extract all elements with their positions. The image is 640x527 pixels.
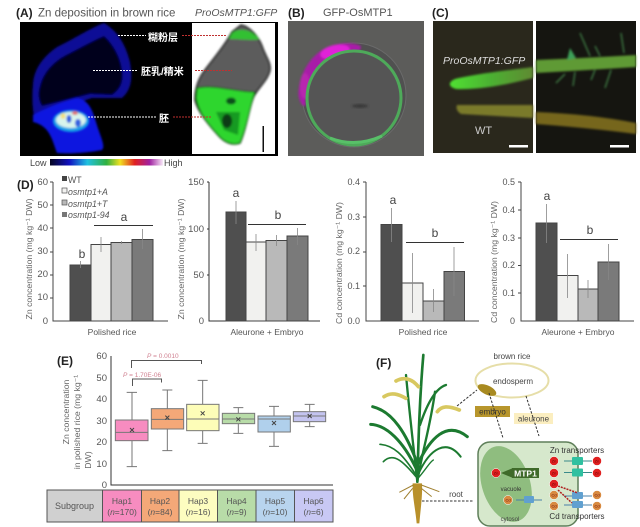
illustration: cell with transporters: Cd xyxy=(594,504,600,508)
label: aleurone: aleurone xyxy=(518,414,550,424)
axis: y ticks: 50 xyxy=(96,373,107,384)
panel: F model diagram xyxy=(371,352,605,527)
illustration: cell with transporters: vacuole xyxy=(501,487,522,493)
illustration: cell with transporters: cytosol xyxy=(501,517,519,523)
box: Hap3 xyxy=(187,380,219,443)
chart: Zn aleurone + embryo: Aleurone + Embryo xyxy=(230,327,304,337)
heading: F: (F) xyxy=(376,356,391,370)
box: Hap5 xyxy=(258,406,290,446)
axis: y ticks xyxy=(96,351,107,491)
image: ProOsMTP1:GFP grain section xyxy=(192,23,275,154)
box: Hap2 xyxy=(151,390,184,451)
chart: Cd polished rice: Polished rice xyxy=(399,327,448,337)
table: subgroup haplotypes: (n=170) xyxy=(107,507,137,517)
chart: Cd aleurone + embryo: 0.3 xyxy=(502,233,515,243)
image: root tips with label xyxy=(433,21,533,153)
chart: Cd polished rice: 0.0 xyxy=(347,316,360,326)
table: subgroup haplotypes: Hap1 xyxy=(112,496,132,506)
chart: Zn polished rice: 40 xyxy=(37,223,48,234)
illustration: cell with transporters xyxy=(471,439,605,527)
image: root tips with label: ProOsMTP1:GFP xyxy=(443,55,525,67)
table: subgroup haplotypes: (n=6) xyxy=(303,507,324,517)
illustration: grain with endosperm: endosperm xyxy=(493,377,533,386)
chart: Cd polished rice: b xyxy=(432,226,439,240)
legend: Low to High colour scale: Low xyxy=(30,158,47,168)
table: subgroup haplotypes: (n=84) xyxy=(148,507,173,517)
legend: genotypes xyxy=(62,175,110,220)
box: Hap1 xyxy=(115,392,148,467)
chart: Zn polished rice: a xyxy=(121,210,128,224)
label: Zn transporters: Zn transporters xyxy=(550,446,604,455)
chart: Cd polished rice: Cd concentration (mg kg⁻¹ DW) xyxy=(334,202,344,324)
label: MTP1: MTP1 xyxy=(514,468,537,478)
axis: y ticks: 10 xyxy=(96,459,107,470)
label: brown rice: brown rice xyxy=(494,352,531,361)
chart: Cd polished rice: 0.1 xyxy=(347,281,360,291)
illustration: cell with transporters: Zn xyxy=(595,458,599,464)
legend: genotypes: osmtp1+A xyxy=(68,187,108,197)
label: embryo callout: 胚 xyxy=(159,113,169,125)
heading: D: (D) xyxy=(17,178,34,192)
illustration: cell with transporters: Zn xyxy=(552,482,556,486)
title: ProOsMTP1:GFP: ProOsMTP1:GFP xyxy=(195,7,277,19)
label: endosperm callout: 胚乳/精米 xyxy=(141,65,184,78)
label: embryo: embryo xyxy=(479,408,506,416)
illustration: cell with transporters: Zn xyxy=(552,470,556,476)
chart: Cd aleurone + embryo: 0.5 xyxy=(502,177,515,187)
axis title: Zn concentration in polished rice: DW) xyxy=(83,451,93,469)
table: subgroup haplotypes: Hap5 xyxy=(265,496,285,506)
chart: Cd aleurone + embryo: b xyxy=(587,223,594,237)
chart: Cd aleurone + embryo: 0.2 xyxy=(502,260,515,270)
title: Zn deposition in brown rice: Zn deposition in brown rice xyxy=(38,8,175,20)
chart: Zn polished rice xyxy=(24,177,168,337)
panel: B GFP-OsMTP1 xyxy=(288,6,424,156)
axis title: Zn concentration in polished rice: in polished rice (mg kg⁻¹ xyxy=(72,375,82,469)
illustration: cell with transporters: Cd xyxy=(551,492,557,498)
label: root: root xyxy=(449,490,464,499)
illustration: rice plant xyxy=(371,355,467,523)
chart: Zn polished rice: 10 xyxy=(37,292,48,303)
image: root tips with label: WT xyxy=(475,125,492,137)
label: embryo xyxy=(475,406,510,417)
table: subgroup haplotypes xyxy=(47,490,333,522)
illustration: cell with transporters: Cd xyxy=(551,504,557,508)
illustration: cell with transporters: Zn xyxy=(494,470,498,476)
table: subgroup haplotypes: Subgroup xyxy=(55,501,94,511)
chart: Zn polished rice: b xyxy=(79,247,86,261)
chart: Zn polished rice: Polished rice xyxy=(88,327,137,337)
box: Hap6 xyxy=(293,404,326,427)
chart: Cd aleurone + embryo: Cd concentration (mg kg⁻¹ DW) xyxy=(489,201,499,323)
illustration: cell with transporters: Cd xyxy=(505,498,511,502)
chart: Zn aleurone + embryo: b xyxy=(275,208,282,222)
chart: Cd polished rice xyxy=(334,177,479,337)
chart: Zn aleurone + embryo: 100 xyxy=(188,224,204,235)
arrows: tissue connections xyxy=(422,390,539,501)
chart: Zn polished rice: 50 xyxy=(37,200,48,211)
illustration: grain with endosperm xyxy=(476,364,548,398)
chart: Cd aleurone + embryo: Aleurone + Embryo xyxy=(542,327,615,337)
illustration: cell with transporters: Zn xyxy=(595,470,599,476)
chart: Zn aleurone + embryo: 0 xyxy=(199,316,204,327)
panel: A Zn deposition xyxy=(16,6,278,168)
image: protoplast micrograph xyxy=(288,21,424,156)
chart: Zn polished rice: 30 xyxy=(37,246,48,257)
axis title: Zn concentration in polished rice xyxy=(61,375,93,469)
panel: E haplotype box plot xyxy=(47,351,333,522)
image: root with root hairs xyxy=(536,21,636,153)
image: Zn heat map of grain xyxy=(20,22,278,156)
legend: genotypes: osmtp1+T xyxy=(68,199,108,209)
label: embryo callout xyxy=(88,113,212,125)
panel: C root GFP xyxy=(432,6,636,153)
table: subgroup haplotypes: Hap4 xyxy=(226,496,247,506)
axis: y ticks: 0 xyxy=(102,480,107,491)
chart: Zn polished rice: 0 xyxy=(43,316,48,327)
legend: genotypes: WT xyxy=(68,175,82,185)
heading: B: (B) xyxy=(288,6,305,20)
axis: y ticks: 60 xyxy=(96,351,107,362)
table: subgroup haplotypes: (n=10) xyxy=(263,507,288,517)
chart: Cd polished rice: 0.3 xyxy=(347,212,360,222)
label: aleurone callout xyxy=(118,31,226,44)
chart: Zn aleurone + embryo: a xyxy=(233,186,240,200)
chart: Cd polished rice: 0.2 xyxy=(347,246,360,256)
chart: Cd aleurone + embryo: 0 xyxy=(510,316,515,326)
annotation: P value brackets: P = 0.0010 xyxy=(147,353,179,360)
label: endosperm callout xyxy=(93,65,232,78)
chart: Zn aleurone + embryo xyxy=(176,177,320,337)
annotation: P value brackets xyxy=(123,353,202,386)
label: aleurone callout: 糊粉层 xyxy=(148,31,178,44)
axis: y ticks: 20 xyxy=(96,437,107,448)
table: subgroup haplotypes: (n=9) xyxy=(226,507,247,517)
legend: Low to High colour scale xyxy=(30,158,183,168)
chart: Zn polished rice: Zn concentration (mg kg⁻¹ DW) xyxy=(24,198,34,319)
table: subgroup haplotypes: Hap2 xyxy=(150,496,170,506)
table: subgroup haplotypes: Hap6 xyxy=(303,496,324,506)
title: GFP-OsMTP1: GFP-OsMTP1 xyxy=(323,7,393,19)
legend: genotypes: osmtp1-94 xyxy=(68,210,110,220)
legend: Low to High colour scale: High xyxy=(164,158,183,168)
axis title: Zn concentration in polished rice: Zn concentration xyxy=(61,379,71,444)
heading: C: (C) xyxy=(432,6,449,20)
chart: Cd aleurone + embryo: 0.1 xyxy=(502,288,515,298)
illustration: cell with transporters: Zn xyxy=(552,458,556,464)
table: subgroup haplotypes: (n=16) xyxy=(186,507,211,517)
illustration: cell with transporters: Cd xyxy=(594,492,600,498)
axis: y ticks: 40 xyxy=(96,394,107,405)
chart: Zn aleurone + embryo: Zn concentration (mg kg⁻¹ DW) xyxy=(176,198,186,319)
chart: Zn polished rice: 60 xyxy=(37,177,48,188)
chart: Cd aleurone + embryo: 0.4 xyxy=(502,205,515,215)
chart: Cd aleurone + embryo xyxy=(489,177,634,337)
heading: A: (A) xyxy=(16,6,33,20)
annotation: P value brackets: P = 1.70E-06 xyxy=(123,372,162,379)
chart: Cd polished rice: 0.4 xyxy=(347,177,360,187)
panel: D bar charts xyxy=(17,175,634,337)
chart: box plots xyxy=(115,380,326,467)
chart: Cd aleurone + embryo: a xyxy=(544,189,551,203)
chart: Zn aleurone + embryo: 150 xyxy=(188,177,204,188)
chart: Zn polished rice: 20 xyxy=(37,269,48,280)
label: aleurone xyxy=(514,413,553,424)
box: Hap4 xyxy=(222,408,255,433)
chart: Zn aleurone + embryo: 50 xyxy=(193,270,204,281)
table: subgroup haplotypes: Hap3 xyxy=(188,496,208,506)
label: Cd transporters: Cd transporters xyxy=(549,512,605,521)
axis: y ticks: 30 xyxy=(96,416,107,427)
heading: E: (E) xyxy=(57,354,73,368)
chart: Cd polished rice: a xyxy=(390,193,397,207)
